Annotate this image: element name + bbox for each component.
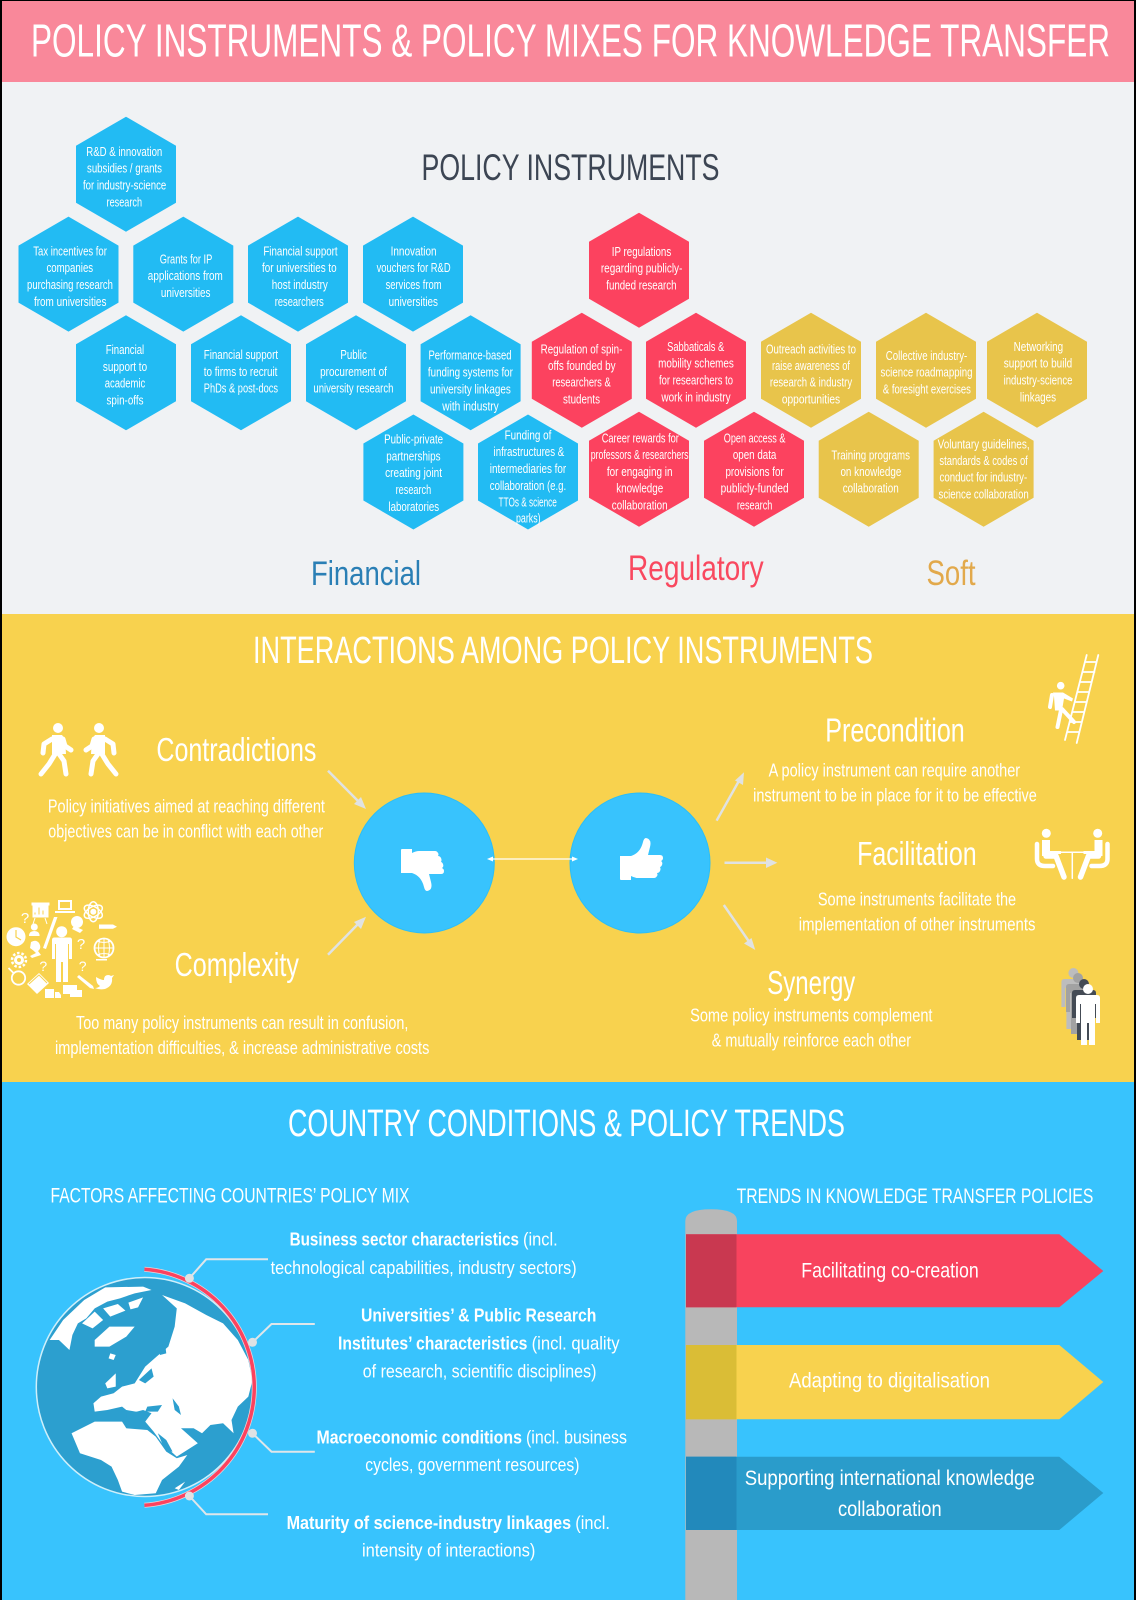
hexagon: voluntary guidelines: science collaboration: [938, 488, 1029, 502]
factor: universities and PRIs: of research, scientific disciplines): [363, 1360, 596, 1381]
hexagon: host researchers: Financial support: [263, 244, 338, 258]
hexagon: public-private partnerships: laboratories: [388, 500, 439, 514]
text: facilitation: implementation of other instruments: [799, 914, 1035, 935]
hexagon: innovation vouchers: services from: [386, 278, 442, 292]
hexagon: spin-off regulation: students: [563, 393, 600, 407]
icon: complexity cluster: [6, 900, 117, 998]
signpost pole: [685, 1209, 737, 1600]
hexagon: innovation vouchers: [363, 217, 463, 332]
hexagon: roadmapping: [876, 313, 976, 428]
hexagon: innovation vouchers: universities: [389, 295, 438, 309]
text: synergy: Some policy instruments complement: [690, 1005, 932, 1026]
icon: people at a table: [1037, 829, 1108, 878]
hexagon: outreach: raise awareness of: [772, 359, 850, 373]
hexagon group: financial instruments: [18, 117, 578, 529]
hexagon: innovation vouchers: Innovation: [391, 244, 437, 258]
sign: facilitating co-creation: Facilitating co-creation: [801, 1260, 979, 1283]
hexagon: roadmapping: & foresight exercises: [883, 383, 971, 397]
hexagon: IP regulations: IP regulations: [612, 245, 671, 259]
hexagon: spin-off support: Financial: [106, 343, 144, 357]
heading: interactions: INTERACTIONS AMONG POLICY INSTRUMENTS: [253, 630, 873, 672]
panel: country conditions and policy trends: [2, 1082, 1134, 1600]
hexagon: spin-off regulation: [532, 313, 632, 428]
hexagon: R&D subsidies: R&D & innovation: [86, 145, 162, 159]
sign: adapting to digitalisation: Adapting to digitalisation: [789, 1369, 990, 1392]
header banner: [2, 1, 1134, 82]
text: facilitation: [799, 835, 1035, 935]
text: contradictions: Contradictions: [156, 731, 316, 768]
hexagon group: regulatory instruments: [532, 213, 804, 527]
hexagon: public procurement: Public: [340, 348, 367, 362]
hexagon: IP regulations: regarding publicly-: [601, 262, 682, 276]
icon: two walkers: [41, 723, 116, 774]
icon: complexity cluster: ?: [79, 958, 87, 974]
factor: macroeconomic: Macroeconomic conditions: [316, 1426, 522, 1447]
hexagon: spin-off support: [76, 315, 176, 430]
hexagon: voluntary guidelines: Voluntary guidelines,: [938, 437, 1030, 451]
factor: universities and PRIs: [338, 1305, 620, 1381]
hexagon: recruit PhDs: to firms to recruit: [204, 365, 278, 379]
hexagon: open access: Open access &: [724, 431, 786, 445]
factor: business sector: [271, 1229, 577, 1278]
hexagon: host researchers: researchers: [275, 295, 324, 309]
text: facilitation: Some instruments facilitate the: [818, 888, 1016, 909]
text: complexity: implementation difficulties, & increase administrative costs: [55, 1037, 429, 1058]
text: complexity: Too many policy instruments can result in confusion,: [76, 1012, 408, 1033]
factor: macroeconomic: cycles, government resources): [365, 1454, 580, 1475]
sign: supporting international collaboration: Supporting international knowledge: [745, 1467, 1035, 1490]
hexagon: public-private partnerships: creating joint: [385, 466, 442, 480]
hexagon: R&D subsidies: research: [107, 195, 142, 209]
hexagon: spin-off support: support to: [103, 360, 147, 374]
factor: business sector: Business sector characteristics: [290, 1229, 519, 1250]
hexagon: networking: industry-science: [1004, 373, 1072, 387]
hexagon: networking: support to build: [1004, 357, 1072, 371]
factor: maturity of linkages: [287, 1512, 610, 1561]
factor: universities and PRIs: Universities’ & Public Research: [361, 1305, 596, 1326]
hexagon: IP grants: applications from: [148, 269, 223, 283]
panel: policy instruments: [2, 82, 1134, 614]
text: complexity: [55, 946, 429, 1058]
hexagon: host researchers: for universities to: [262, 261, 337, 275]
hexagon: IP grants: [133, 217, 233, 332]
hexagon: open access: research: [737, 499, 772, 513]
icon: person climbing ladder: [1050, 655, 1098, 743]
hexagon: sabbaticals: work in industry: [661, 390, 731, 404]
hexagon: performance-based funding: funding systems for: [428, 366, 513, 380]
hexagon: performance-based funding: Performance-based: [428, 349, 512, 363]
hexagon: tax incentives: [18, 217, 118, 332]
hexagon: R&D subsidies: for industry-science: [83, 178, 166, 192]
arrow: complexity to negative interactions: [328, 917, 366, 955]
hexagon: voluntary guidelines: [934, 412, 1034, 527]
panel: interactions among policy instruments: [2, 614, 1134, 1082]
icon: stacked people: [1061, 968, 1100, 1045]
hexagon: spin-off regulation: Regulation of spin-: [541, 342, 622, 356]
hexagon: infrastructure funding: [478, 414, 578, 530]
hexagon: tax incentives: from universities: [34, 295, 106, 309]
text: facilitation: Facilitation: [857, 835, 977, 872]
hexagon: open access: provisions for: [725, 465, 784, 479]
hexagon: spin-off regulation: researchers &: [552, 376, 611, 390]
hexagon: public procurement: [306, 315, 406, 430]
text: synergy: & mutually reinforce each other: [712, 1030, 911, 1051]
hexagon: open access: publicly-funded: [721, 482, 789, 496]
arc with connector dots: [144, 1259, 315, 1514]
hexagon: outreach: [761, 313, 861, 428]
hexagon: IP regulations: funded research: [606, 278, 677, 292]
hexagon: spin-off support: spin-offs: [106, 394, 144, 408]
hexagon: training: [819, 412, 919, 527]
hexagon: infrastructure funding: Funding of: [505, 428, 552, 442]
hexagon: outreach: Outreach activities to: [766, 342, 856, 356]
arrow: to synergy: [724, 905, 755, 950]
subheading: factors: FACTORS AFFECTING COUNTRIES’ POLICY MIX: [50, 1185, 410, 1208]
hexagon: career rewards: for engaging in: [607, 465, 673, 479]
text: synergy: [690, 964, 932, 1051]
hexagon: spin-off support: academic: [105, 377, 145, 391]
sign: supporting international collaboration: [686, 1457, 1103, 1530]
arrow: to precondition: [717, 772, 744, 821]
factor: macroeconomic: (incl. business: [526, 1426, 627, 1447]
hexagon: networking: linkages: [1020, 390, 1056, 404]
text: contradictions: objectives can be in conflict with each other: [48, 821, 323, 842]
hexagon: IP grants: Grants for IP: [160, 252, 212, 266]
hexagon: public procurement: university research: [313, 382, 393, 396]
hexagon: recruit PhDs: [191, 315, 291, 430]
hexagon: sabbaticals: mobility schemes: [658, 357, 734, 371]
hexagon: tax incentives: purchasing research: [27, 278, 113, 292]
hexagon: infrastructure funding: collaboration (e.g.: [490, 479, 566, 493]
hexagon: roadmapping: science roadmapping: [880, 366, 973, 380]
hexagon: host researchers: [248, 217, 348, 332]
hexagon: career rewards: knowledge: [616, 482, 663, 496]
hexagon: public-private partnerships: partnerships: [386, 449, 441, 463]
text: complexity: Complexity: [175, 946, 299, 983]
hexagon: career rewards: collaboration: [612, 499, 668, 513]
hexagon: performance-based funding: university linkages: [430, 382, 511, 396]
hexagon: training: collaboration: [843, 482, 899, 496]
hexagon: R&D subsidies: [76, 117, 176, 232]
hexagon: open access: open data: [733, 448, 776, 462]
text: contradictions: [48, 731, 325, 842]
factor: business sector: technological capabilities, industry sectors): [271, 1257, 577, 1278]
hexagon: voluntary guidelines: conduct for industry-: [940, 471, 1027, 485]
hexagon: recruit PhDs: Financial support: [204, 348, 278, 362]
text: precondition: A policy instrument can require another: [769, 760, 1020, 781]
arrow: double-headed between circles: [487, 856, 578, 862]
factor: universities and PRIs: Institutes’ characteristics: [338, 1332, 527, 1353]
text: precondition: [753, 712, 1037, 806]
hexagon: sabbaticals: for researchers to: [659, 373, 733, 387]
hexagon: open access: [704, 412, 804, 527]
hexagon: infrastructure funding: TTOs & science: [499, 495, 557, 509]
sign: facilitating co-creation: [686, 1234, 1103, 1307]
factor: macroeconomic: [316, 1426, 627, 1475]
hexagon: networking: [987, 313, 1087, 428]
hexagon: public procurement: procurement of: [320, 365, 387, 379]
factor: business sector: (incl.: [523, 1229, 558, 1250]
hexagon: IP grants: universities: [161, 286, 210, 300]
hexagon: tax incentives: companies: [46, 261, 93, 275]
hexagon: outreach: research & industry: [770, 376, 853, 390]
hexagon: networking: Networking: [1014, 340, 1063, 354]
text: synergy: Synergy: [767, 964, 856, 1001]
hexagon: voluntary guidelines: standards & codes of: [939, 454, 1028, 468]
circle: thumbs up: [570, 793, 710, 933]
hexagon: training: Training programs: [831, 448, 910, 462]
label: regulatory: Regulatory: [628, 549, 764, 588]
hexagon: recruit PhDs: PhDs & post-docs: [204, 382, 278, 396]
hexagon: performance-based funding: [421, 315, 521, 430]
hexagon: innovation vouchers: vouchers for R&D: [377, 261, 451, 275]
hexagon: career rewards: professors & researchers: [591, 448, 688, 462]
hexagon: spin-off regulation: offs founded by: [548, 359, 616, 373]
sign: supporting international collaboration: collaboration: [838, 1498, 942, 1521]
hexagon: infrastructure funding: parks): [516, 511, 541, 525]
factor: maturity of linkages: Maturity of science-industry linkages: [287, 1512, 571, 1533]
icon: globe: [36, 1278, 253, 1496]
hexagon: outreach: opportunities: [782, 393, 840, 407]
circle: thumbs down: [354, 793, 494, 933]
arrow: contradictions to negative interactions: [328, 771, 366, 809]
hexagon: infrastructure funding: intermediaries for: [490, 462, 566, 476]
hexagon: R&D subsidies: subsidies / grants: [87, 162, 162, 176]
hexagon: performance-based funding: with industry: [441, 399, 499, 413]
label: financial: Financial: [311, 555, 421, 593]
hexagon: public-private partnerships: research: [396, 483, 431, 497]
hexagon: host researchers: host industry: [272, 278, 328, 292]
text: precondition: Precondition: [825, 712, 965, 749]
heading: policy instruments: POLICY INSTRUMENTS: [422, 147, 720, 188]
hexagon: training: on knowledge: [840, 465, 901, 479]
factor: maturity of linkages: intensity of interactions): [362, 1540, 535, 1561]
text: contradictions: Policy initiatives aimed at reaching different: [48, 796, 325, 817]
hexagon: career rewards: Career rewards for: [602, 431, 679, 445]
text: precondition: instrument to be in place for it to be effective: [753, 785, 1037, 806]
hexagon: infrastructure funding: infrastructures &: [494, 445, 565, 459]
icon: complexity cluster: ?: [39, 958, 47, 974]
hexagon: career rewards: [589, 412, 689, 527]
factor: universities and PRIs: (incl. quality: [532, 1332, 620, 1353]
hexagon: IP regulations: [589, 213, 689, 328]
arrow: to facilitation: [724, 858, 777, 868]
hexagon group: soft instruments: [761, 313, 1087, 527]
hexagon: sabbaticals: [646, 313, 746, 428]
label: soft: Soft: [926, 554, 976, 593]
heading: country conditions: COUNTRY CONDITIONS & POLICY TRENDS: [288, 1103, 845, 1145]
factor: maturity of linkages: (incl.: [575, 1512, 610, 1533]
hexagon: public-private partnerships: Public-private: [384, 432, 443, 446]
hexagon: roadmapping: Collective industry-: [886, 349, 967, 363]
sign: adapting to digitalisation: [686, 1345, 1103, 1419]
icon: complexity cluster: ?: [77, 936, 85, 953]
icon: complexity cluster: ?: [21, 910, 29, 927]
hexagon: sabbaticals: Sabbaticals &: [667, 340, 725, 354]
hexagon: public-private partnerships: [363, 414, 463, 530]
hexagon: tax incentives: Tax incentives for: [33, 244, 107, 258]
